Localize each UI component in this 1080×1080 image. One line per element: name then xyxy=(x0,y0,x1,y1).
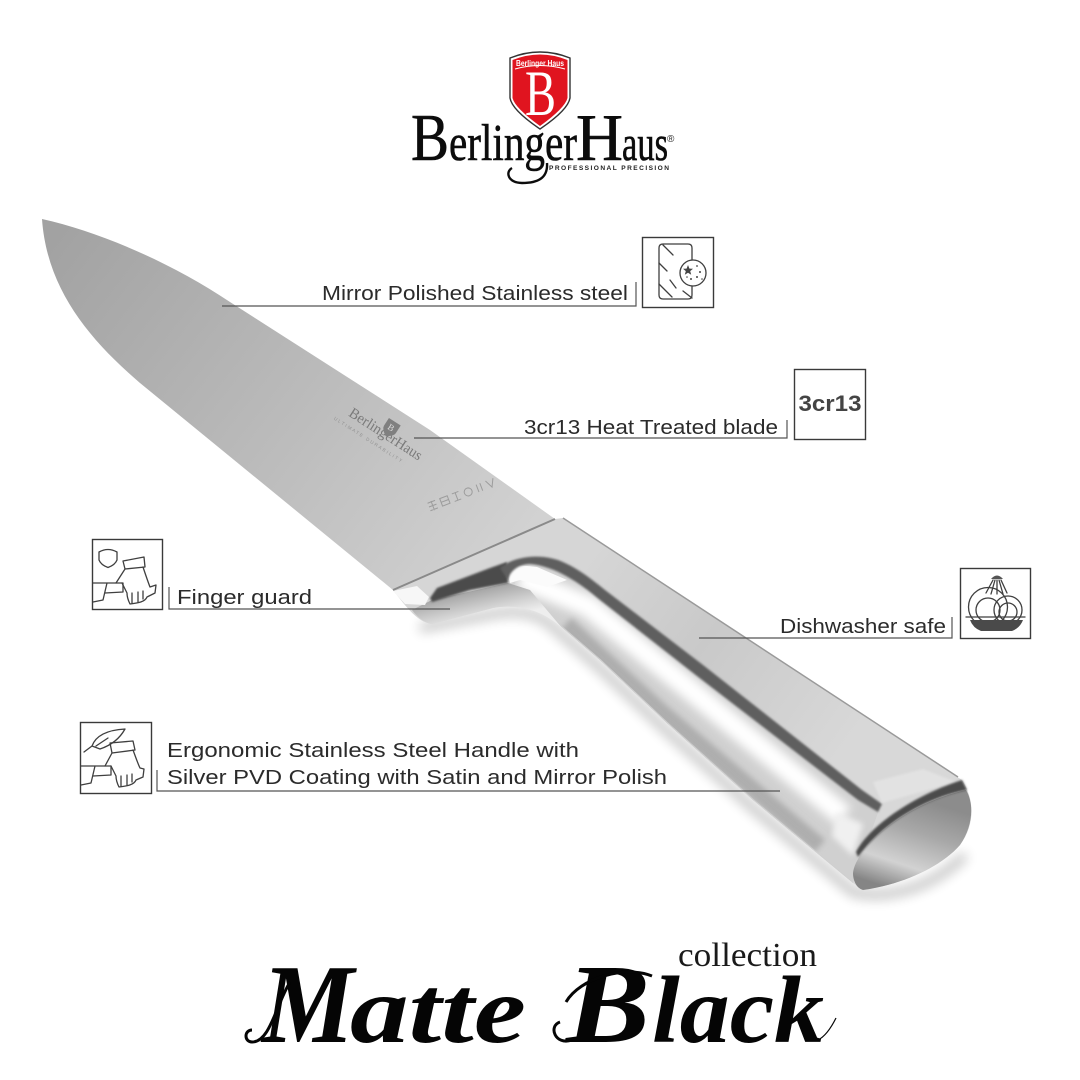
callout: dishwasher safe xyxy=(699,568,1030,638)
wordmark: aus xyxy=(622,115,668,171)
bolster shoulder highlight xyxy=(507,565,567,587)
dark reflection wedge xyxy=(430,562,508,602)
butt end dark rim xyxy=(856,780,967,857)
title swash: B strokes xyxy=(554,972,652,1041)
icon: dishwasher xyxy=(960,568,1030,638)
dark reflection band xyxy=(500,557,882,812)
wordmark xyxy=(411,101,668,175)
blade engraving: brand mark: BerlingerHaus xyxy=(346,405,425,464)
wordmark: B xyxy=(411,101,449,175)
label: Dishwasher safe xyxy=(780,615,946,638)
blade engraving: brand mark: B xyxy=(386,422,396,433)
label: Finger guard xyxy=(177,586,312,609)
label: Black: lack xyxy=(652,957,824,1063)
label: collection: collection xyxy=(678,937,817,974)
label line 1: Ergonomic Stainless Steel Handle with xyxy=(167,739,579,762)
callout: ergonomic handle xyxy=(80,722,780,794)
upper collar highlight xyxy=(873,769,956,803)
butt end cap xyxy=(853,790,971,890)
label: Black: B xyxy=(564,943,650,1067)
knife xyxy=(42,219,972,900)
leader line xyxy=(699,617,952,638)
collection title xyxy=(246,937,836,1067)
label: 3cr13 Heat Treated blade xyxy=(524,416,778,439)
wordmark g descender loop xyxy=(508,163,547,183)
icon: hand and feather xyxy=(80,722,152,794)
blade stamped mark xyxy=(427,477,496,512)
label line 2: Silver PVD Coating with Satin and Mirror Polish xyxy=(167,766,667,789)
logo: Berlinger Haus xyxy=(411,52,675,183)
blade and bolster seam xyxy=(393,519,555,590)
knife shadow xyxy=(420,612,965,895)
wordmark: erlinger xyxy=(449,115,577,172)
leader line xyxy=(157,770,780,791)
lower collar highlight xyxy=(832,812,863,856)
title swash: k tail xyxy=(818,1018,836,1040)
icon: red shield: B xyxy=(525,58,556,130)
label: Matte: atte xyxy=(350,957,526,1063)
leader line xyxy=(414,420,787,438)
callout: mirror polished xyxy=(222,238,714,308)
blade engraving: brand mark: ULTIMATE DURABILITY xyxy=(333,416,403,463)
label: Black xyxy=(564,943,824,1067)
icon: red shield xyxy=(510,52,570,130)
label: Mirror Polished Stainless steel xyxy=(322,282,628,305)
title swash: M tail xyxy=(246,982,290,1042)
leader line xyxy=(169,587,450,609)
callout: finger guard xyxy=(92,540,450,610)
upper edge line xyxy=(563,518,958,777)
blade engraving: brand mark xyxy=(333,393,429,471)
wordmark: H xyxy=(576,101,623,175)
blade xyxy=(42,219,555,590)
tagline: PROFESSIONAL PRECISION xyxy=(549,165,669,172)
icon: hand and shield xyxy=(92,540,162,610)
callout: 3cr13 blade xyxy=(414,370,866,440)
guard tip highlight xyxy=(393,586,429,605)
lower handle body xyxy=(516,580,853,883)
icon: 3cr13 badge xyxy=(794,370,866,440)
icon: polished surface xyxy=(642,238,714,308)
icon: 3cr13 badge: 3cr13 xyxy=(798,391,862,416)
registered mark: ® xyxy=(667,134,675,145)
leader line xyxy=(222,282,636,306)
icon: red shield: Berlinger Haus xyxy=(516,59,564,68)
label: Matte: M xyxy=(260,943,357,1067)
handle silhouette xyxy=(393,518,972,890)
label: Matte xyxy=(260,943,526,1067)
finger guard xyxy=(412,583,562,628)
